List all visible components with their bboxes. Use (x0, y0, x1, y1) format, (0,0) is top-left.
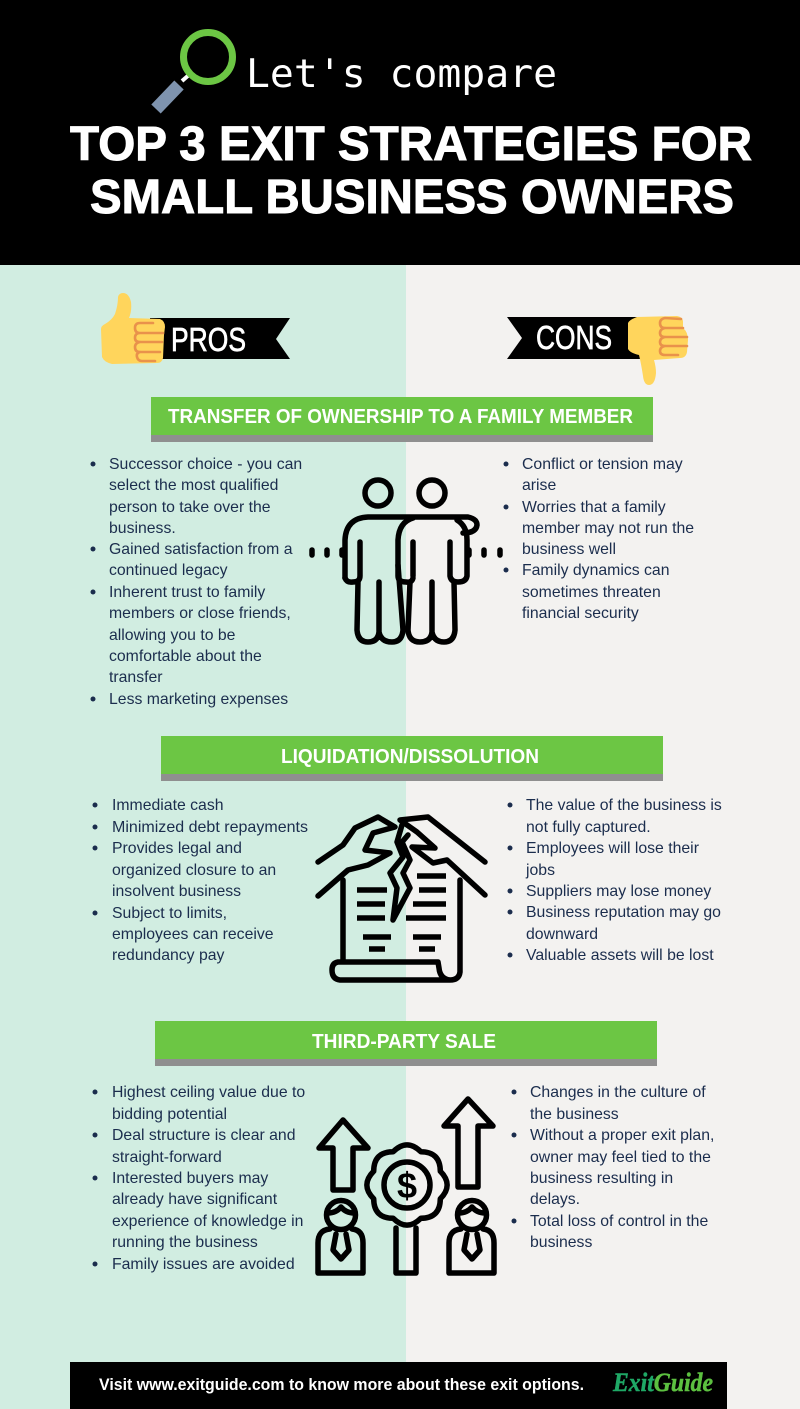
text block: liquidation cons: Employees will lose their (526, 840, 699, 857)
title: TOP 3 EXIT STRATEGIES FOR (70, 118, 752, 171)
text block: liquidation pros: employees can receive (112, 926, 274, 943)
icon: two people embracing (312, 480, 500, 642)
text block: third-party cons: Total loss of control in the (530, 1213, 708, 1230)
text block: liquidation cons: not fully captured. (526, 819, 651, 836)
text block: third-party cons (512, 1084, 714, 1251)
text block: liquidation cons: Valuable assets will be lost (526, 947, 714, 964)
section banner: liquidation (161, 736, 663, 781)
text block: liquidation pros: insolvent business (112, 883, 241, 900)
text block: liquidation cons: Business reputation may go (526, 904, 721, 921)
background: cons side (406, 265, 800, 1409)
icon: magnifying glass (156, 32, 232, 109)
icon: dollar sign: $ (397, 1165, 417, 1206)
pros ribbon: PROS (171, 321, 246, 358)
text block: family transfer cons: arise (522, 477, 556, 494)
text block: family transfer cons: Conflict or tension may (522, 456, 683, 473)
text block: liquidation cons: Suppliers may lose money (526, 883, 711, 900)
icon: thumbs down (628, 316, 688, 385)
text block: liquidation pros: Subject to limits, (112, 905, 227, 922)
text block: third-party pros (92, 1084, 305, 1273)
text block: liquidation pros (92, 797, 308, 964)
text block: family transfer pros: Gained satisfaction from a (109, 541, 293, 558)
text block: third-party cons: Changes in the culture of (530, 1084, 706, 1101)
text block: liquidation pros: redundancy pay (112, 947, 225, 964)
section banner: family transfer (151, 397, 653, 442)
text block: third-party cons: the business (530, 1106, 619, 1123)
text block: third-party pros: Interested buyers may (112, 1170, 268, 1187)
text block: third-party pros: running the business (112, 1234, 258, 1251)
text block: liquidation cons: The value of the business is (526, 797, 722, 814)
text block: family transfer cons: member may not run the (522, 520, 694, 537)
text block: third-party pros: Family issues are avoided (112, 1256, 295, 1273)
text block: third-party pros: Deal structure is clear and (112, 1127, 296, 1144)
text block: family transfer cons: Worries that a family (522, 499, 666, 516)
text block: liquidation pros: Immediate cash (112, 797, 224, 814)
text block: family transfer pros: select the most qualified (109, 477, 278, 494)
text block: liquidation pros: Minimized debt repayments (112, 819, 308, 836)
text block: family transfer cons: Family dynamics can (522, 562, 669, 579)
icon: torn document house (318, 817, 485, 980)
section banner: third-party sale: THIRD-PARTY SALE (312, 1031, 496, 1053)
text block: third-party cons: business (530, 1234, 592, 1251)
text block: family transfer pros: continued legacy (109, 562, 228, 579)
text block: third-party pros: straight-forward (112, 1149, 222, 1166)
text block: third-party pros: bidding potential (112, 1106, 227, 1123)
footer text: Visit www.exitguide.com to know more about these exit options. (99, 1375, 584, 1394)
section banner: third-party sale (155, 1021, 657, 1066)
header panel (0, 0, 800, 265)
footer bar (70, 1362, 727, 1409)
text block: family transfer pros: comfortable about the (109, 648, 262, 665)
text block: liquidation pros: organized closure to an (112, 862, 276, 879)
title: SMALL BUSINESS OWNERS (90, 171, 734, 224)
text block: family transfer cons: financial security (522, 605, 639, 622)
icon: thumbs up (101, 293, 165, 364)
subtitle: Let's compare (246, 52, 557, 97)
text block: liquidation pros: Provides legal and (112, 840, 242, 857)
section banner: liquidation: LIQUIDATION/DISSOLUTION (281, 746, 539, 768)
text block: liquidation cons: downward (526, 926, 598, 943)
text block: third-party cons: owner may feel tied to the (530, 1149, 711, 1166)
text block: family transfer pros: members or close friends, (109, 605, 291, 622)
text block: family transfer pros: person to take over the (109, 499, 271, 516)
text block: liquidation cons (508, 797, 722, 964)
text block: third-party pros: experience of knowledge in (112, 1213, 303, 1230)
pros ribbon (150, 318, 290, 359)
section banner: family transfer: TRANSFER OF OWNERSHIP TO A FAMILY MEMBER (168, 406, 634, 428)
text block: family transfer pros (90, 456, 302, 708)
text block: family transfer pros: allowing you to be (109, 627, 236, 644)
cons ribbon (507, 317, 645, 359)
text block: third-party cons: delays. (530, 1191, 580, 1208)
text block: third-party cons: Without a proper exit plan, (530, 1127, 714, 1144)
text block: family transfer pros: business. (109, 520, 176, 537)
text block: family transfer pros: Successor choice - you can (109, 456, 302, 473)
logo: ExitGuide: ExitGuide (612, 1368, 713, 1397)
background: pros side (0, 265, 406, 1409)
text block: family transfer pros: Inherent trust to family (109, 584, 265, 601)
text block: family transfer cons: sometimes threaten (522, 584, 661, 601)
title (70, 118, 752, 224)
icon: bidding arrows and price badge (318, 1099, 494, 1273)
text block: third-party pros: Highest ceiling value due to (112, 1084, 305, 1101)
text block: family transfer pros: Less marketing expenses (109, 691, 288, 708)
text block: liquidation cons: jobs (525, 862, 555, 879)
text block: third-party pros: already have significant (112, 1191, 278, 1208)
text block: family transfer pros: transfer (109, 669, 163, 686)
text block: third-party cons: business resulting in (530, 1170, 673, 1187)
text block: family transfer cons (504, 456, 694, 622)
cons ribbon: CONS (536, 319, 612, 356)
text block: family transfer cons: business well (522, 541, 616, 558)
